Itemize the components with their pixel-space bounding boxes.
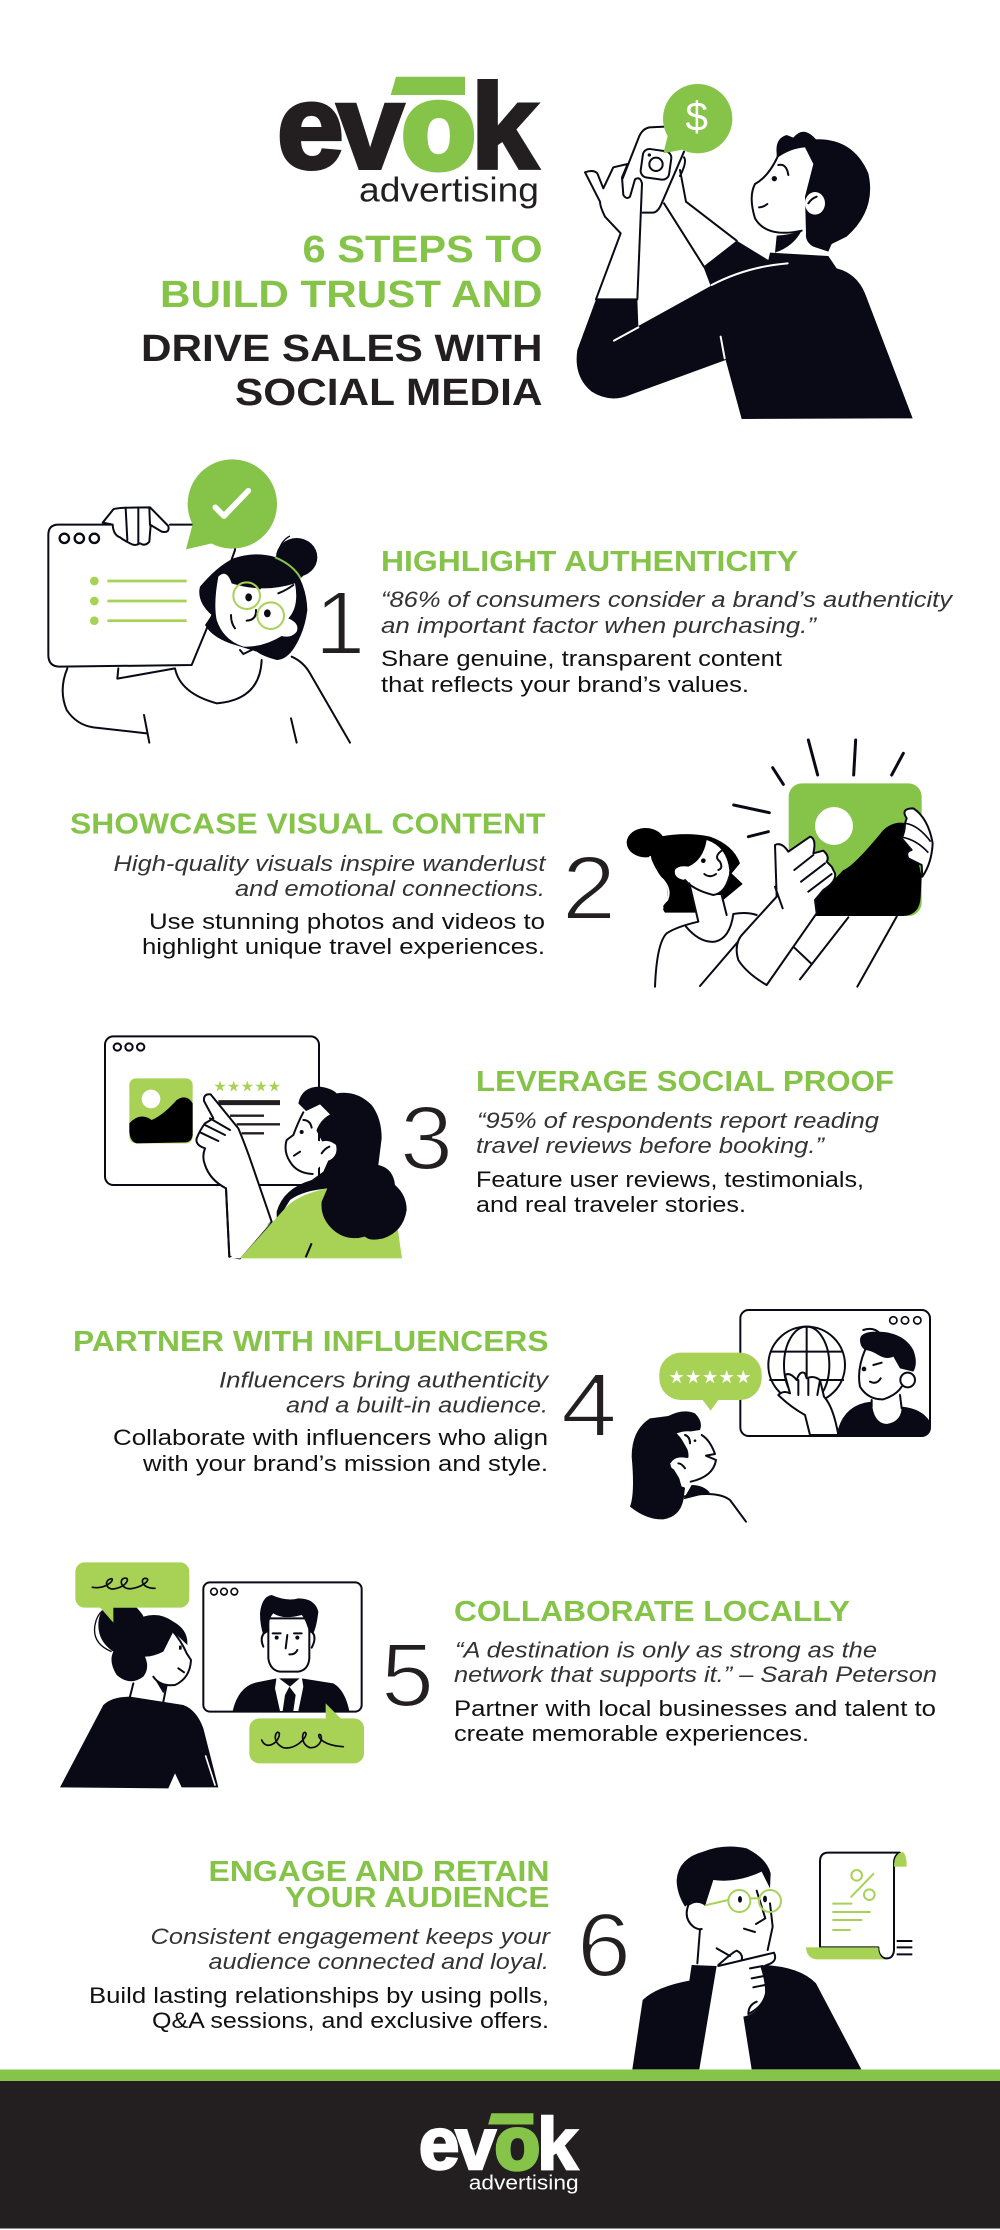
quote: Influencers bring authenticity (219, 1368, 550, 1392)
icon: speech bubble bottom (249, 1703, 364, 1763)
step 2 illustration: woman holding up a photo (627, 740, 933, 987)
body: highlight unique travel experiences. (142, 934, 545, 959)
step 2 text (70, 808, 547, 959)
header logo: v (337, 60, 404, 194)
icon: photo thumbnail (129, 1078, 193, 1143)
heading: COLLABORATE LOCALLY (454, 1596, 850, 1628)
quote: network that supports it.” – Sarah Peterson (454, 1662, 937, 1687)
step 6 illustration: thoughtful man with scroll (632, 1846, 912, 2069)
body: Share genuine, transparent content (381, 646, 783, 671)
quote (150, 1924, 552, 1974)
icon: globe (768, 1327, 845, 1403)
quote: “A destination is only as strong as the (455, 1638, 877, 1662)
quote: and a built-in audience. (286, 1392, 548, 1418)
icon: dollar speech bubble (663, 84, 732, 153)
body: Collaborate with influencers who align (113, 1425, 548, 1450)
quote: “86% of consumers consider a brand’s authenticity (381, 587, 954, 612)
step 1 number: 1 (315, 574, 365, 674)
quote: an important factor when purchasing.” (381, 613, 818, 638)
body: with your brand’s mission and style. (142, 1451, 548, 1476)
heading: LEVERAGE SOCIAL PROOF (476, 1066, 894, 1098)
quote (114, 851, 547, 901)
header logo: o (402, 60, 475, 194)
heading (208, 1856, 550, 1914)
quote (381, 587, 954, 638)
title: BUILD TRUST AND (160, 274, 542, 316)
footer logo: v (455, 2103, 496, 2185)
hero illustration: man photographing with phone (577, 84, 913, 419)
icon: dollar speech bubble: $ (685, 94, 708, 140)
title: 6 STEPS TO (302, 229, 542, 271)
quote: High-quality visuals inspire wanderlust (114, 851, 547, 876)
step 3 number: 3 (400, 1089, 453, 1189)
title: DRIVE SALES WITH (141, 328, 542, 370)
step 1 text (381, 546, 954, 697)
heading: SHOWCASE VISUAL CONTENT (70, 808, 546, 840)
quote: “95% of respondents report reading (477, 1108, 880, 1133)
body (476, 1167, 864, 1217)
icon: photo card (789, 783, 922, 916)
heading: HIGHLIGHT AUTHENTICITY (381, 546, 798, 578)
step 5 illustration: woman and video call with man (60, 1562, 364, 1788)
header logo: e (277, 60, 344, 194)
footer logo: k (537, 2103, 578, 2185)
step 4 illustration: woman and influencer video window (630, 1310, 930, 1522)
body (142, 909, 545, 959)
footer logo (419, 2103, 579, 2195)
rating stars (214, 1081, 280, 1092)
body (89, 1983, 549, 2033)
quote (454, 1638, 937, 1687)
body: Use stunning photos and videos to (149, 909, 545, 934)
title (141, 229, 542, 414)
body (454, 1696, 936, 1746)
checklist lines (90, 577, 187, 625)
body: that reflects your brand’s values. (381, 672, 749, 697)
footer logo: advertising (469, 2172, 579, 2195)
body: Feature user reviews, testimonials, (476, 1167, 864, 1192)
footer logo: o (495, 2103, 540, 2185)
heading: PARTNER WITH INFLUENCERS (73, 1326, 548, 1358)
header logo: k (471, 60, 538, 194)
step 5 text (454, 1596, 937, 1746)
step 4 text (73, 1326, 550, 1476)
quote: audience connected and loyal. (208, 1949, 549, 1974)
quote: Consistent engagement keeps your (150, 1924, 552, 1949)
step 3 text (476, 1066, 894, 1217)
heading: YOUR AUDIENCE (285, 1882, 550, 1914)
step 6 text (89, 1856, 552, 2033)
quote (476, 1108, 880, 1158)
heading: ENGAGE AND RETAIN (208, 1856, 550, 1888)
step 4 number: 4 (561, 1356, 617, 1456)
body: and real traveler stories. (476, 1192, 746, 1217)
step 1 illustration: woman holding a checklist window (48, 459, 350, 743)
icon: five-star speech bubble (659, 1353, 762, 1411)
step 2 number: 2 (562, 839, 616, 939)
quote: travel reviews before booking.” (476, 1133, 826, 1158)
header logo: advertising (359, 172, 539, 210)
body: create memorable experiences. (454, 1721, 809, 1746)
icon: check speech bubble (186, 459, 277, 549)
header logo (277, 60, 539, 210)
body: Q&A sessions, and exclusive offers. (152, 2008, 549, 2033)
step 3 illustration: woman pointing at review window (105, 1036, 407, 1258)
footer logo: e (419, 2103, 459, 2185)
quote (219, 1368, 550, 1418)
footer band (0, 2070, 1000, 2228)
body: Partner with local businesses and talent to (454, 1696, 936, 1721)
title: SOCIAL MEDIA (235, 372, 542, 414)
body (381, 646, 783, 697)
body (113, 1425, 548, 1476)
icon: speech bubble top (75, 1562, 189, 1623)
step 5 number: 5 (381, 1626, 434, 1726)
step 6 number: 6 (577, 1896, 631, 1996)
quote: and emotional connections. (235, 876, 545, 901)
icon: percent scroll (806, 1852, 912, 1959)
body: Build lasting relationships by using polls, (89, 1983, 549, 2008)
